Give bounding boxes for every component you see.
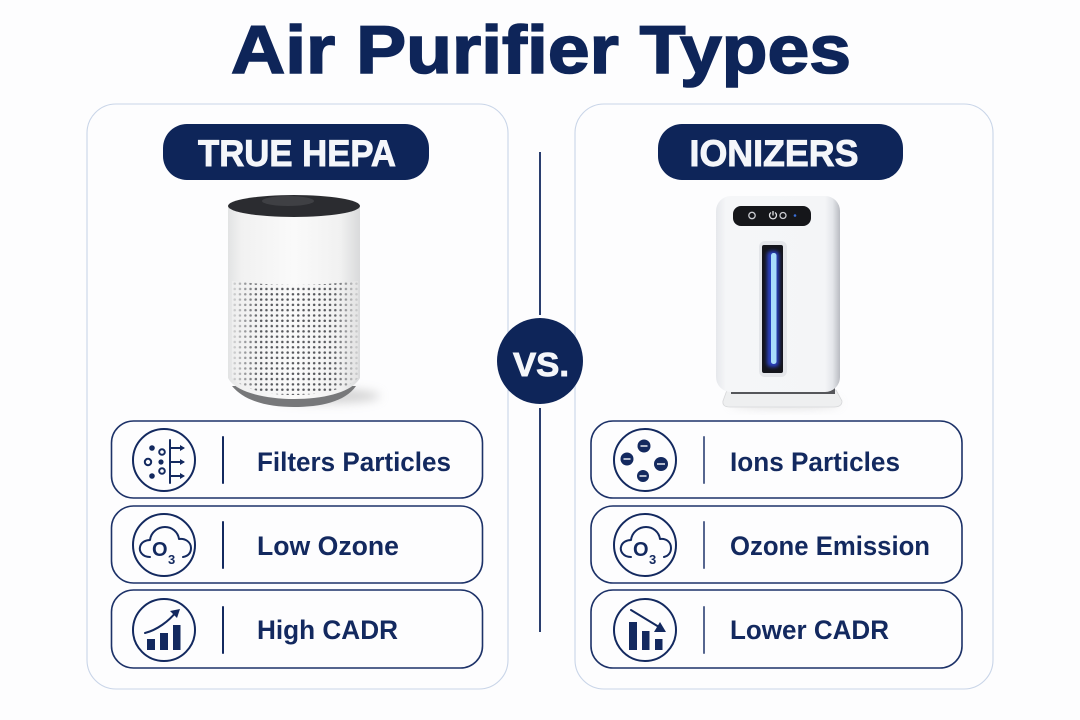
- feature: high cadr: [112, 590, 482, 668]
- icon: rising bars: [133, 599, 195, 661]
- icon: ozone cloud: O: [152, 539, 168, 561]
- label: lower cadr: Lower CADR: [730, 615, 889, 645]
- product image: cylindrical hepa purifier: [228, 195, 380, 407]
- title: Air Purifier Types: [231, 12, 851, 88]
- heading: ionizers: IONIZERS: [690, 133, 858, 174]
- icon: ozone cloud: [614, 514, 676, 576]
- heading: true hepa: TRUE HEPA: [198, 133, 396, 174]
- label: ions particles: Ions Particles: [730, 447, 900, 477]
- vs badge: VS.: [513, 346, 569, 383]
- label: ozone emission: Ozone Emission: [730, 531, 930, 561]
- label: high cadr: High CADR: [257, 615, 398, 645]
- label: filters particles: Filters Particles: [257, 447, 451, 477]
- panel: ionizers: [575, 104, 993, 689]
- feature: low ozone: [112, 506, 482, 583]
- heading: ionizers: [658, 124, 903, 180]
- icon: ozone cloud: 3: [649, 552, 656, 567]
- panel: true hepa: [87, 104, 508, 689]
- icon: negative ions: [614, 429, 676, 491]
- icon: falling bars: [614, 599, 676, 661]
- product image: ionizer tower: [716, 196, 842, 407]
- feature: filters particles: [112, 421, 482, 498]
- heading: true hepa: [163, 124, 429, 180]
- icon: ozone cloud: O: [633, 539, 649, 561]
- icon: ozone cloud: [133, 514, 195, 576]
- feature: ozone emission: [591, 506, 962, 583]
- vs badge: [497, 318, 583, 404]
- icon: filter with particles: [133, 429, 195, 491]
- icon: ozone cloud: 3: [168, 552, 175, 567]
- feature: ions particles: [591, 421, 962, 498]
- feature: lower cadr: [591, 590, 962, 668]
- label: low ozone: Low Ozone: [257, 531, 399, 561]
